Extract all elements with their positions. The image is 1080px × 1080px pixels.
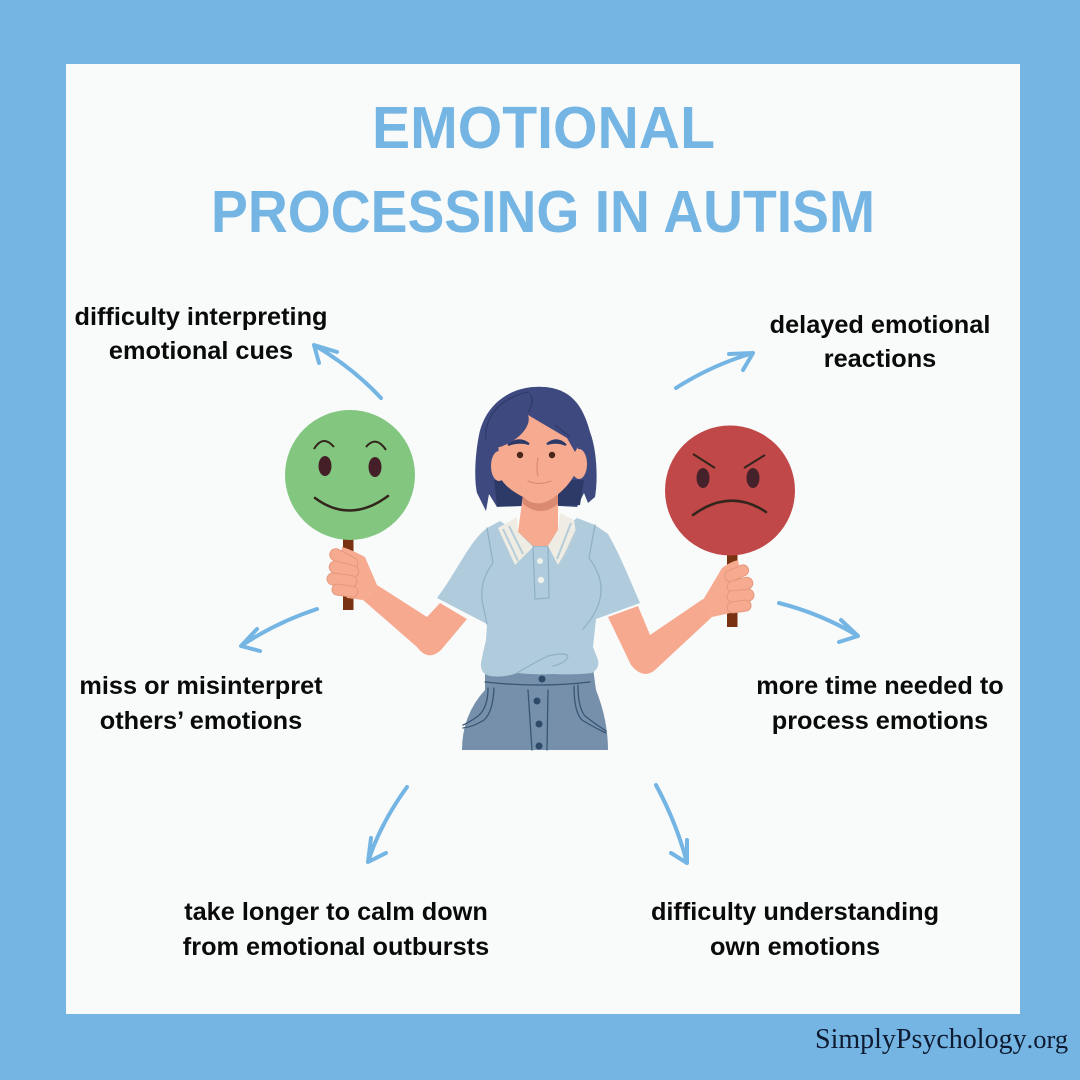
neck shadow: [523, 495, 558, 511]
ears: [491, 451, 507, 481]
skirt: [462, 668, 608, 750]
hair strand detail: [486, 392, 570, 440]
label: miss or misinterpret others' emotions: miss or misinterpret: [79, 672, 323, 700]
arrow: to middle-left label: [241, 609, 317, 651]
sign: red angry face: [665, 426, 795, 627]
label: delayed emotional reactions: reactions: [824, 345, 936, 373]
sign: green happy face: [285, 410, 415, 610]
arrow: to upper-right label: [676, 353, 753, 388]
facial features: [508, 440, 566, 484]
shirt: [437, 518, 640, 677]
arrow: to upper-left label: [314, 345, 381, 398]
label: difficulty understanding own emotions: own emotions: [710, 933, 880, 961]
arrow: to middle-right label: [779, 603, 858, 642]
label: more time needed to process emotions: process emotions: [772, 707, 988, 735]
label: take longer to calm down from emotional outbursts: take longer to calm down: [184, 898, 488, 926]
title: EMOTIONAL: [372, 95, 715, 161]
left hand: [326, 547, 377, 600]
label: more time needed to process emotions: [756, 672, 1004, 735]
arrow: to bottom-right label: [656, 785, 687, 863]
left arm: [363, 585, 467, 655]
label: difficulty interpreting emotional cues: [75, 303, 327, 365]
label: miss or misinterpret others' emotions: [79, 672, 323, 735]
illustration: woman holding emotion signs: [285, 387, 795, 750]
label: take longer to calm down from emotional outbursts: from emotional outbursts: [183, 933, 489, 961]
hair back: [475, 387, 597, 511]
footer: SimplyPsychology.org: SimplyPsychology.org: [815, 1024, 1068, 1055]
label: miss or misinterpret others' emotions: others’ emotions: [100, 707, 302, 735]
arrow: to bottom-left label: [368, 787, 407, 862]
collar: [498, 513, 576, 565]
neck: [518, 495, 558, 546]
label: difficulty interpreting emotional cues: difficulty interpreting: [75, 303, 327, 331]
label: take longer to calm down from emotional outbursts: [183, 898, 489, 961]
panel: main white card: [66, 64, 1020, 1014]
label: difficulty interpreting emotional cues: emotional cues: [109, 337, 293, 365]
right hand: [703, 560, 755, 617]
label: delayed emotional reactions: [770, 311, 990, 373]
label: difficulty understanding own emotions: difficulty understanding: [651, 898, 939, 926]
label: more time needed to process emotions: more time needed to: [756, 672, 1004, 700]
label: difficulty understanding own emotions: [651, 898, 939, 961]
face: [498, 412, 578, 503]
title: [211, 95, 875, 245]
right arm: [608, 599, 712, 674]
hair front: [481, 387, 584, 452]
title: PROCESSING IN AUTISM: [211, 179, 875, 245]
hair shadow: [494, 480, 584, 506]
label: delayed emotional reactions: delayed emotional: [770, 311, 990, 339]
